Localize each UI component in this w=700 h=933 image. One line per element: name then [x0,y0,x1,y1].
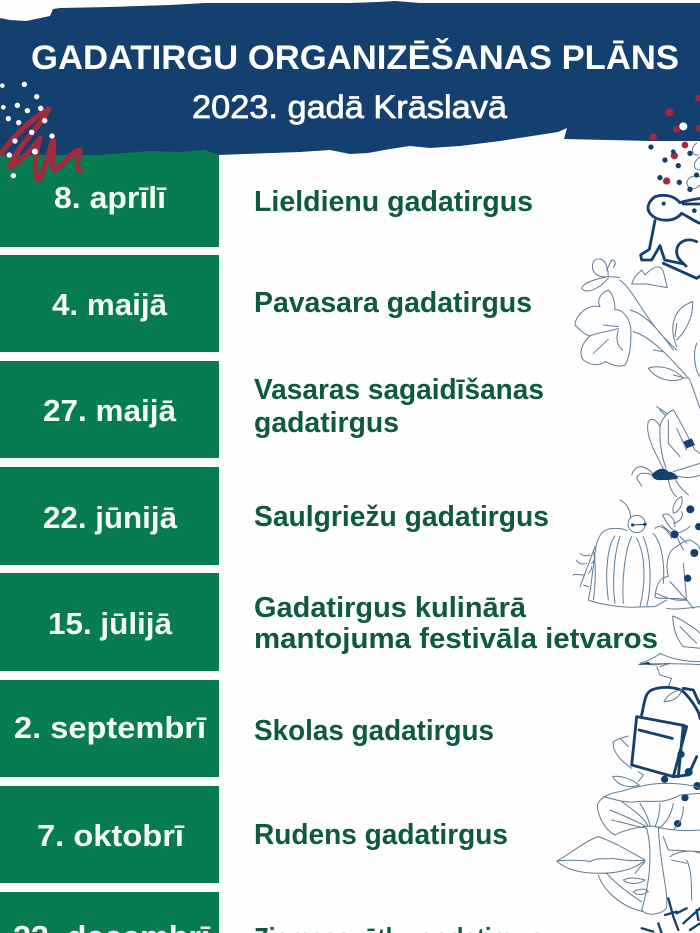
event names: Skolas gadatirgus [254,715,494,747]
event names: Gadatirgus kulinārā [254,592,527,624]
small leaves [613,736,643,787]
icon: backpack and mushrooms [557,662,700,933]
icon: top right dots and curls [648,95,700,192]
leaf sprig [662,497,690,550]
title: GADATIRGU ORGANIZĒŠANAS PLĀNS [31,38,679,77]
dates: 2. septembrī [14,710,206,745]
pudding [588,500,672,607]
dates: 8. aprīlī [54,180,166,215]
event names: Rudens gadatirgus [254,819,508,851]
icon: rabbit and flowers [575,195,700,408]
dates [13,180,210,933]
event names: gadatirgus [254,407,399,439]
flowers [575,259,700,408]
header banner [0,1,700,155]
butterfly [632,407,700,497]
event names: Saulgriežu gadatirgus [254,501,549,533]
small sprig [573,547,595,587]
event names [254,186,658,933]
event names: Lieldienu gadatirgus [254,186,533,218]
dates: 4. maijā [52,287,168,322]
rabbit [641,195,700,278]
date column: green bars [0,150,219,933]
dates: 7. oktobrī [37,818,184,853]
small mushroom [557,837,648,912]
dates: 27. maijā [43,393,177,428]
dates: 22. jūnijā [43,500,178,535]
subtitle: 2023. gadā Krāslavā [192,89,507,125]
icon: butterfly and pudding [573,407,700,667]
icon: red scribble with white dots [0,82,80,180]
dates: 15. jūlijā [48,606,173,641]
large mushroom [597,783,700,914]
event names: mantojuma festivāla ietvaros [254,623,658,655]
maple leaf top [640,616,700,667]
sprig bottom [642,898,700,933]
event names: Pavasara gadatirgus [254,287,532,319]
big leaf plant [655,540,700,609]
backpack [632,687,700,827]
event names: Vasaras sagaidīšanas [254,374,544,406]
